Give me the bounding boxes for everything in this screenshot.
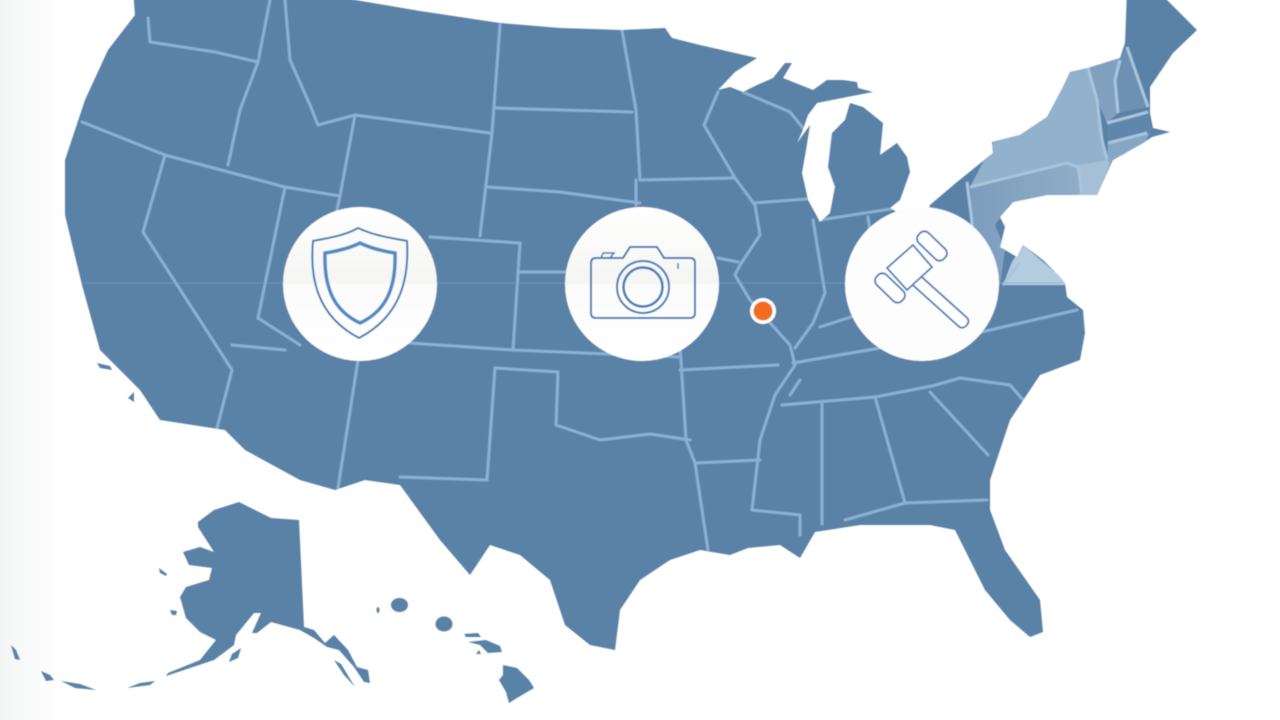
location marker bbox=[750, 298, 776, 324]
icon badge: shield bbox=[283, 207, 437, 361]
map: contiguous United States bbox=[65, 0, 1197, 650]
icon badge: gavel bbox=[845, 207, 999, 361]
state borders bbox=[82, 0, 1077, 550]
northeast state borders bbox=[967, 47, 1148, 285]
map: Hawaii bbox=[376, 598, 534, 703]
icon badge: camera bbox=[565, 207, 719, 361]
map: channel islands bbox=[97, 363, 134, 402]
map: Alaska bbox=[11, 502, 370, 690]
faint horizontal band bbox=[82, 282, 1062, 284]
highlighted northeast states bbox=[970, 47, 1152, 285]
